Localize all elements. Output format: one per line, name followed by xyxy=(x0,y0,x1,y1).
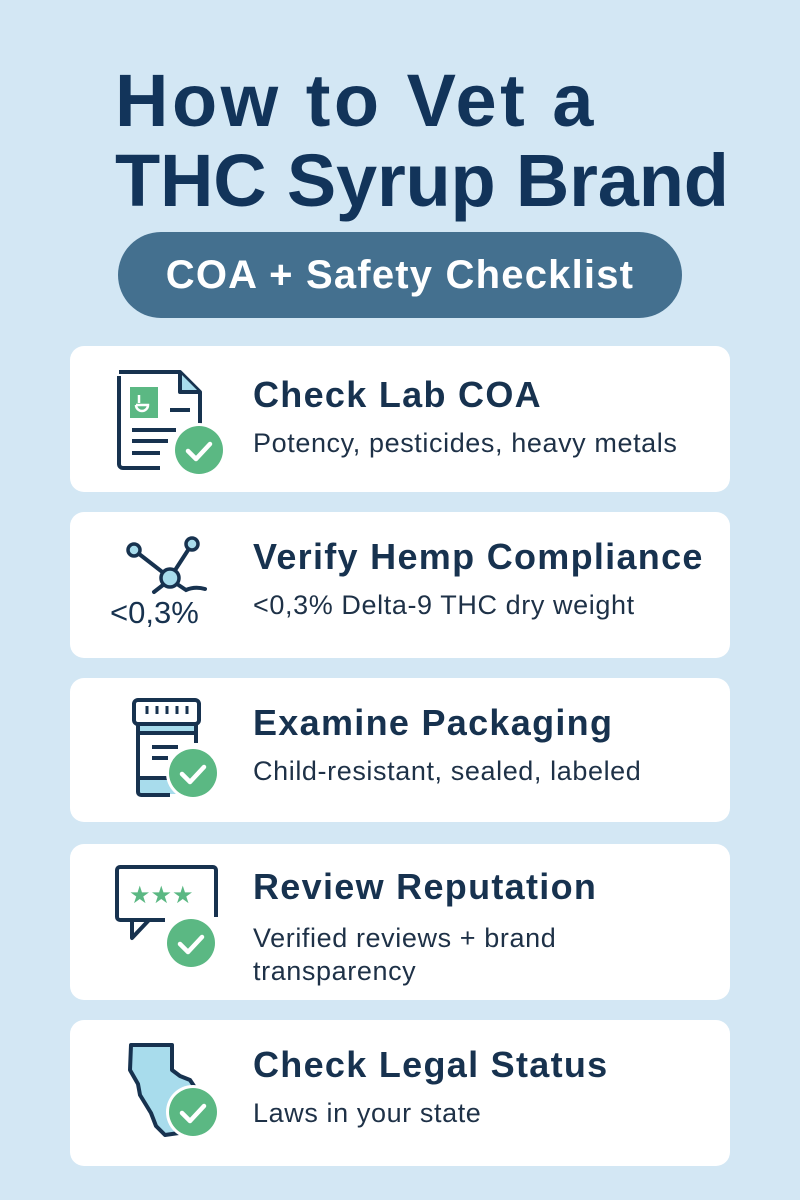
icon: molecule xyxy=(110,536,207,630)
title: THC Syrup Brand xyxy=(115,139,729,222)
subtitle pill xyxy=(118,232,682,318)
icon: review bubble: ★★★ xyxy=(129,881,194,909)
subtitle pill: COA + Safety Checklist xyxy=(166,253,634,297)
panel: reputation: transparency xyxy=(253,956,416,986)
title xyxy=(115,59,729,222)
panel: legal status xyxy=(70,1020,730,1166)
panel: check lab COA xyxy=(70,346,730,492)
icon: document with check xyxy=(117,370,223,474)
panel: packaging: Child-resistant, sealed, labeled xyxy=(253,756,641,786)
panel: hemp compliance: <0,3% Delta-9 THC dry weight xyxy=(253,590,635,620)
text: Potency, pesticides, heavy metals xyxy=(253,428,678,458)
panel: packaging: Examine Packaging xyxy=(253,702,613,743)
panel: hemp compliance: Verify Hemp Compliance xyxy=(253,536,704,577)
panel: legal status: Check Legal Status xyxy=(253,1044,609,1085)
title: How to Vet a xyxy=(115,59,597,142)
panel: reputation: Review Reputation xyxy=(253,866,597,907)
panel: packaging xyxy=(70,678,730,822)
panel: hemp compliance xyxy=(70,512,730,658)
icon: review bubble xyxy=(115,865,218,967)
icon: state map xyxy=(128,1043,217,1137)
panel: reputation xyxy=(70,844,730,1000)
panel: reputation: Verified reviews + brand xyxy=(253,923,556,953)
icon: molecule: <0,3% xyxy=(110,595,199,630)
heading: Check Lab COA xyxy=(253,374,542,415)
icon: bottle with check xyxy=(132,698,217,797)
panel: legal status: Laws in your state xyxy=(253,1098,481,1128)
